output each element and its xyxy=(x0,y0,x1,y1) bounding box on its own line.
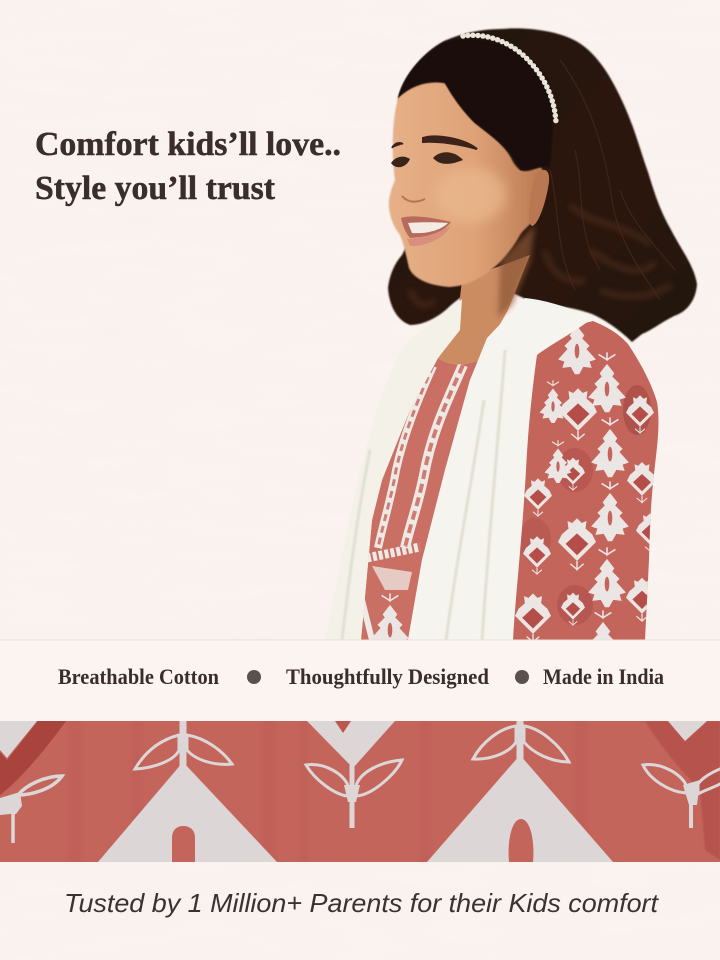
heading xyxy=(35,126,341,207)
fabric streaks xyxy=(68,715,587,870)
print motif: far right xyxy=(668,721,707,741)
face xyxy=(389,82,545,287)
fabric close-up band xyxy=(0,715,720,870)
shawl folds xyxy=(342,350,505,640)
kurta front panel xyxy=(361,358,480,653)
ear xyxy=(529,170,549,226)
separator dot xyxy=(515,670,529,684)
cheek shading xyxy=(434,167,506,223)
dark dye patches xyxy=(0,721,66,795)
neck xyxy=(438,255,530,364)
neck shadow xyxy=(498,225,535,318)
feature strip xyxy=(0,640,720,721)
print motif: left tree xyxy=(98,762,277,862)
heading: Style you’ll trust xyxy=(35,170,276,207)
nose shade xyxy=(402,196,425,202)
heading: Comfort kids’ll love.. xyxy=(35,126,341,163)
print motif: centre xyxy=(307,721,395,768)
photo: girl in kurta and shawl xyxy=(325,28,697,670)
tagline: Tusted by 1 Million+ Parents for their Kids comfort xyxy=(64,888,660,918)
print motif: right tree xyxy=(427,755,613,862)
hair over forehead xyxy=(398,39,553,170)
white shawl xyxy=(325,298,593,640)
pearl headband xyxy=(463,35,556,123)
feature: breathable cotton: Breathable Cotton xyxy=(58,664,219,689)
eyes xyxy=(391,157,410,167)
feature: thoughtfully designed: Thoughtfully Designed xyxy=(286,664,489,689)
kurta sleeve xyxy=(513,321,658,640)
eyebrows xyxy=(392,136,477,149)
mouth xyxy=(401,216,451,238)
separator dot xyxy=(247,670,261,684)
hair strands xyxy=(550,60,675,300)
feature: made in india: Made in India xyxy=(543,664,664,689)
hair highlights xyxy=(410,205,672,305)
print motif: far left xyxy=(0,721,37,758)
hair back xyxy=(388,28,697,342)
